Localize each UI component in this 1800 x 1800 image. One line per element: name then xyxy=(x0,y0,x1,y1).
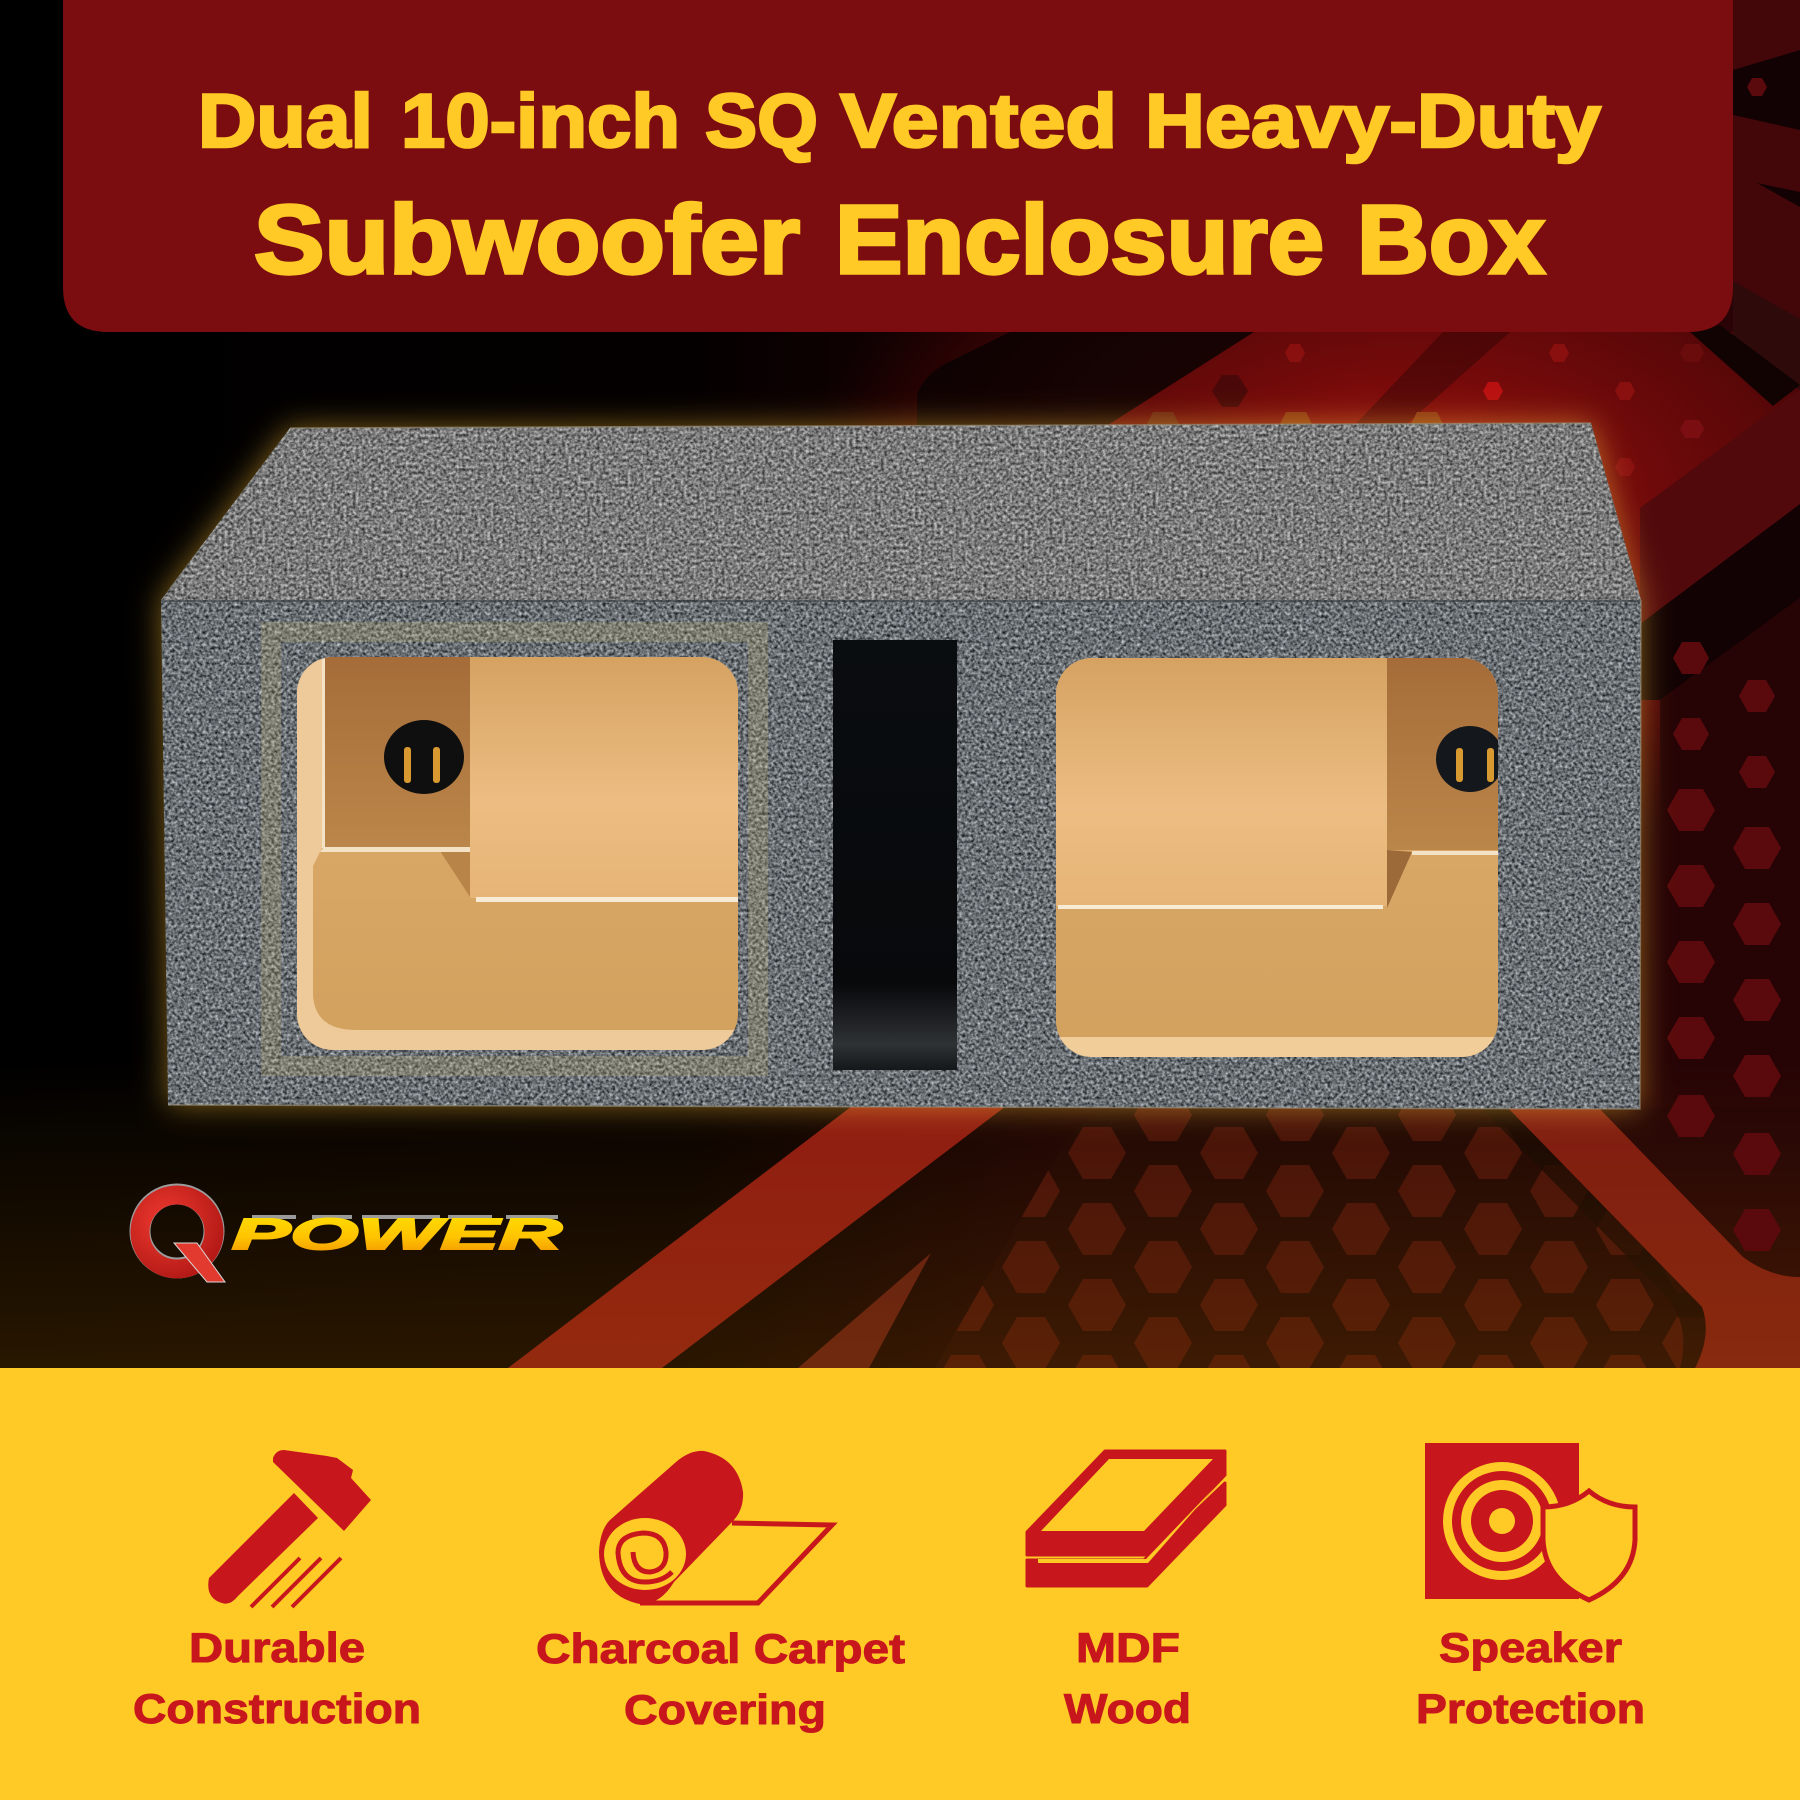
logo wordmark: POWER xyxy=(232,1210,562,1259)
logo chrome highlights xyxy=(252,1215,558,1219)
label xyxy=(133,1624,421,1732)
right speaker opening xyxy=(1056,658,1504,1057)
speaker terminal right xyxy=(1436,726,1504,792)
label: MDF xyxy=(1076,1624,1180,1671)
red diagonal band xyxy=(508,1103,1010,1368)
title line 2: Box xyxy=(1357,185,1545,294)
title line 1: SQ xyxy=(705,79,818,164)
feature: MDF wood xyxy=(1027,1451,1225,1732)
header banner xyxy=(63,0,1733,332)
label: Covering xyxy=(624,1686,826,1733)
icon: speaker with shield xyxy=(1425,1443,1635,1600)
vent port xyxy=(833,640,957,1070)
label: Construction xyxy=(133,1685,421,1732)
title line 1: Dual xyxy=(198,79,373,164)
product: carpeted subwoofer box xyxy=(161,423,1641,1109)
hexagon accents, upper right xyxy=(1145,78,1767,476)
left speaker opening xyxy=(297,657,738,1050)
hexagon columns, right edge xyxy=(1667,642,1781,1251)
title line 1 xyxy=(198,79,1601,164)
speaker terminal left xyxy=(384,720,464,794)
top right panel beside header xyxy=(1733,0,1800,330)
background: dark red geometric backdrop xyxy=(0,0,1800,1368)
label xyxy=(1416,1624,1645,1732)
label: Speaker xyxy=(1439,1624,1622,1671)
title line 2: Enclosure xyxy=(835,185,1324,294)
label: Charcoal Carpet xyxy=(536,1625,905,1672)
feature: charcoal carpet covering xyxy=(536,1451,905,1733)
label: Durable xyxy=(189,1624,365,1671)
label xyxy=(1064,1624,1191,1732)
swoosh behind box xyxy=(917,332,1254,430)
hexagon floor panel xyxy=(935,1107,1706,1368)
logo Q mark xyxy=(140,1194,225,1282)
title line 1: Vented xyxy=(840,79,1117,164)
feature: durable construction xyxy=(133,1450,421,1732)
brand logo: Q Power xyxy=(140,1194,562,1282)
title line 1: Heavy-Duty xyxy=(1145,79,1601,164)
dark block lower right xyxy=(1598,1107,1800,1277)
title line 2 xyxy=(254,185,1545,294)
red stripe upper right xyxy=(1640,390,1800,624)
left speaker highlight frame xyxy=(271,632,758,1066)
label xyxy=(536,1625,905,1733)
icon: hammer xyxy=(208,1450,371,1607)
feature strip xyxy=(0,1368,1800,1800)
label: Protection xyxy=(1416,1685,1645,1732)
feature: speaker protection xyxy=(1416,1443,1645,1732)
title line 1: 10-inch xyxy=(401,79,680,164)
label: Wood xyxy=(1064,1685,1191,1732)
title line 2: Subwoofer xyxy=(254,185,800,294)
box front face xyxy=(161,600,1641,1109)
icon: stacked boards xyxy=(1027,1451,1225,1586)
box top face xyxy=(161,423,1641,600)
bright band lower right xyxy=(1507,1107,1800,1368)
icon: carpet roll xyxy=(599,1451,832,1604)
